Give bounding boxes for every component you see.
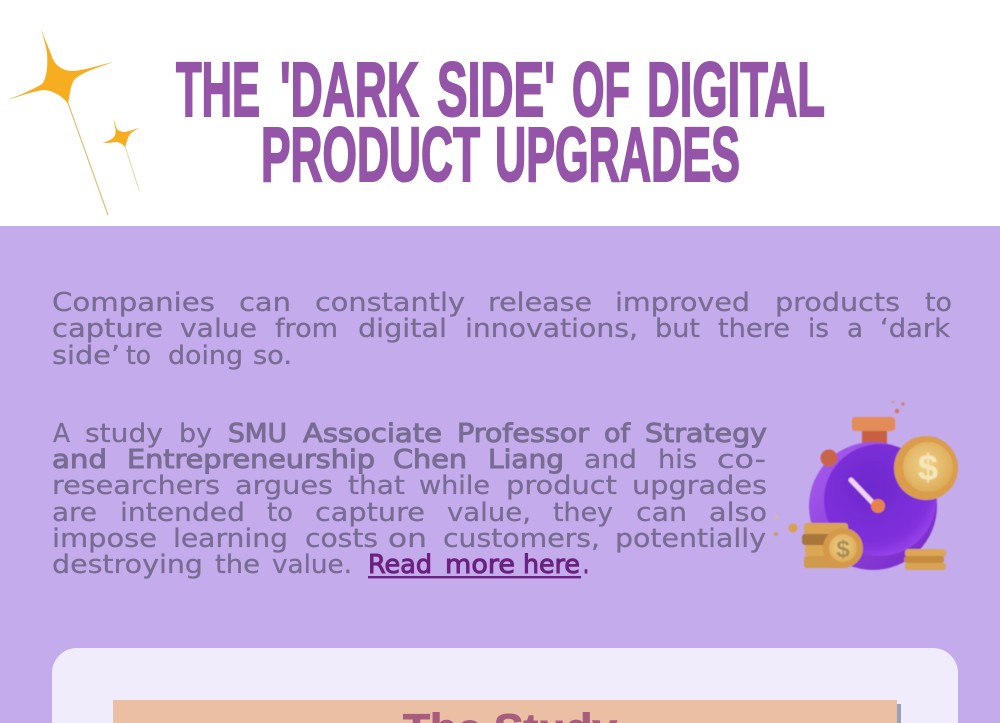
text block: study summary: by [179, 419, 212, 449]
text block: study summary: costs [305, 524, 378, 554]
text block: introduction: Companies [52, 288, 215, 318]
text block: study summary: and [584, 445, 637, 475]
text block: study summary: they [553, 498, 613, 528]
link: read more: more [445, 550, 515, 580]
text block: study summary: to [267, 498, 293, 528]
text block: introduction: side’ [52, 341, 120, 371]
text block: study summary: can [636, 498, 687, 528]
text block: study summary: and [52, 445, 107, 475]
text block: introduction: innovations, [465, 314, 638, 344]
text block: introduction: value [180, 314, 257, 344]
text block: introduction: can [239, 288, 291, 318]
text block: study summary: learning [173, 524, 288, 554]
icon: large sparkle [7, 28, 113, 215]
text block: study summary [52, 419, 767, 580]
text block: study summary: impose [52, 524, 157, 554]
text block: study summary: potentially [615, 524, 766, 554]
text block: study summary: intended [120, 498, 245, 528]
text block: introduction: is [808, 314, 829, 344]
title: 'DARK [280, 47, 419, 133]
text block: introduction: to [925, 288, 952, 318]
text block: introduction: but [655, 314, 700, 344]
text block: study summary: value. [272, 550, 352, 580]
text block: study summary: Strategy [645, 419, 767, 449]
text block: study summary: A [53, 419, 70, 449]
title: PRODUCT [261, 112, 480, 198]
text block: study summary: upgrades [632, 471, 767, 501]
icon: stopwatch with coins: $ [836, 536, 850, 563]
text block: study summary: while [419, 471, 490, 501]
title: OF [572, 47, 630, 133]
text block: study summary: capture [315, 498, 425, 528]
title: SIDE' [437, 47, 555, 133]
text block: introduction: ‘dark [880, 314, 950, 344]
text block: introduction: capture [52, 314, 163, 344]
text block: introduction: so. [253, 341, 292, 371]
text block: study summary: also [709, 498, 767, 528]
link: read more [368, 550, 589, 580]
icon: stopwatch with coins: $ [918, 447, 938, 488]
text block: introduction: products [775, 288, 900, 318]
text block: study summary: customers, [443, 524, 600, 554]
text block: introduction: release [488, 288, 592, 318]
text block: study summary: study [85, 419, 163, 449]
text block: introduction: improved [615, 288, 750, 318]
text block: introduction: a [847, 314, 863, 344]
text block: introduction: digital [358, 314, 447, 344]
band shadow [897, 704, 901, 723]
text block: study summary: destroying [52, 550, 203, 580]
background panel: lilac [0, 226, 1000, 723]
title: THE [176, 47, 260, 133]
text block: introduction: from [275, 314, 338, 344]
text block: study summary: that [348, 471, 405, 501]
title [176, 47, 825, 198]
link: read more: Read [368, 550, 432, 580]
text block: study summary: researchers [52, 471, 220, 501]
text block: study summary: argues [235, 471, 333, 501]
text block: study summary: SMU [228, 419, 287, 449]
panel: the study card [52, 648, 958, 723]
text block: introduction: there [718, 314, 790, 344]
icon: small sparkle [102, 117, 140, 190]
text block: study summary: co- [717, 445, 766, 475]
text block: introduction: doing [168, 341, 243, 371]
text block: study summary: value, [447, 498, 531, 528]
icon: stopwatch with coins [774, 400, 958, 570]
text block: study summary: his [658, 445, 697, 475]
text block: study summary: Associate [303, 419, 442, 449]
title: UPGRADES [495, 112, 740, 198]
text block: study summary: Chen [393, 445, 467, 475]
text block: study summary: Liang [488, 445, 564, 475]
text block: study summary: on [388, 524, 427, 554]
text block: introduction: to [126, 341, 151, 371]
text block: study summary: Entrepreneurship [127, 445, 375, 475]
text block: study summary: the [215, 550, 260, 580]
text block: study summary: Professor [457, 419, 589, 449]
text block: study summary: are [52, 498, 97, 528]
link: read more: here [523, 550, 580, 580]
text block: study summary: of [604, 419, 631, 449]
title: DIGITAL [647, 47, 825, 133]
text block: introduction [52, 288, 952, 371]
text block: study summary: product [506, 471, 617, 501]
link: read more: . [583, 550, 589, 580]
heading band [113, 700, 897, 723]
text block: introduction: constantly [315, 288, 465, 318]
